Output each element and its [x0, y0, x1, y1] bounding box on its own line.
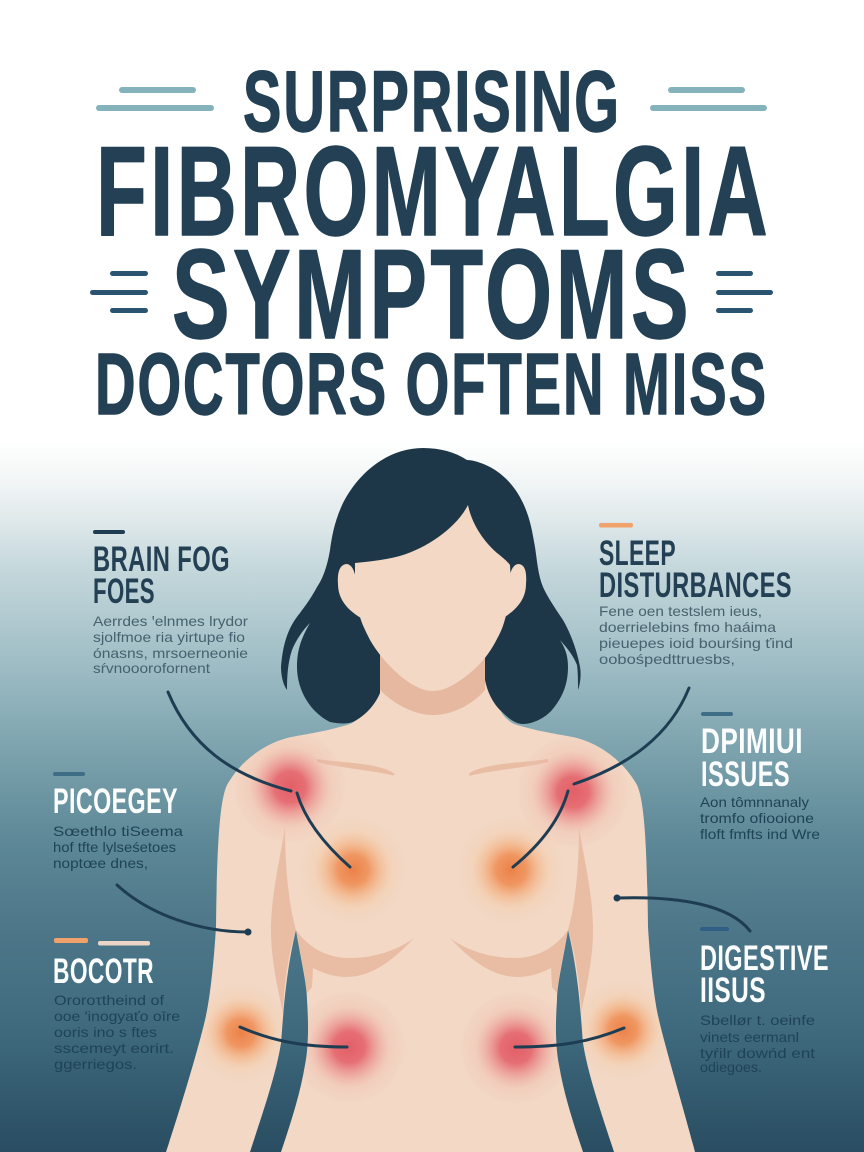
description: odiegoes.	[700, 1059, 762, 1075]
accent bar	[701, 712, 733, 716]
description: ooris ino s ftes	[54, 1024, 157, 1040]
description: ooe ʹinogyaťo oīre	[54, 1008, 180, 1024]
description	[599, 603, 793, 667]
heading: SLEEP	[599, 534, 676, 573]
panel: bocotr	[53, 938, 180, 1072]
hot spot: right chest	[469, 828, 553, 912]
description: sŕvnooorofornent	[93, 660, 210, 676]
description: pieuepes ioid bourśing ťind	[599, 635, 793, 651]
panel: sleep disturbances	[599, 523, 793, 667]
panel: digestive issues	[700, 927, 829, 1075]
figure: woman silhouette	[166, 448, 695, 1152]
title accent lines, lower	[90, 271, 773, 313]
connector: right elbow to abdomen	[515, 1028, 624, 1047]
connector dot: left arm	[244, 928, 252, 936]
connector: sleep to shoulder	[574, 688, 689, 784]
panel: brain fog foes	[93, 530, 248, 676]
hot spot: left chest	[311, 828, 395, 912]
description: Sbellør t. oeinfe	[700, 1012, 815, 1028]
heading second line: IISUS	[700, 971, 766, 1010]
description: floft fmfts ind Wre	[700, 826, 820, 842]
description	[700, 1012, 815, 1075]
heading: BOCOTR	[53, 952, 154, 991]
connector dot: right arm	[614, 894, 620, 902]
orange accent bar	[54, 938, 88, 943]
description	[93, 613, 248, 676]
heading: BRAIN FOG	[93, 540, 230, 579]
accent bar	[700, 927, 729, 931]
description: Sœethlo tiSeema	[53, 823, 183, 839]
description: Fene oen testslem ieus,	[599, 603, 762, 619]
neck shadow	[380, 655, 485, 715]
title accent lines, upper	[96, 87, 767, 111]
description	[54, 992, 180, 1072]
accent bar	[93, 530, 125, 534]
heading: DPIMIUI	[701, 722, 803, 761]
description: doerrielebins fmo haáima	[599, 619, 776, 635]
description: sjolfmoe ria yirtupe fio	[93, 629, 245, 645]
hot spot: right elbow	[581, 991, 664, 1068]
title line: surprising: SURPRISING	[243, 54, 621, 150]
heading second line: FOES	[93, 572, 155, 611]
connector: shoulder to left chest	[297, 793, 350, 867]
panel: dpimiui issues	[700, 712, 820, 842]
connector: brain fog to shoulder	[168, 692, 291, 791]
panel: picoegey	[53, 772, 183, 871]
connector: right arm to label	[617, 898, 750, 931]
beige accent bar	[98, 941, 150, 946]
description: noptœe dnes,	[53, 855, 148, 871]
description	[53, 823, 183, 871]
description: Aerrdes ꞌelnmes lrydor	[93, 613, 248, 629]
right ear	[503, 564, 526, 618]
heading second line: ISSUES	[701, 755, 790, 794]
title	[95, 54, 771, 433]
description: ónasns, mrsoerneonie	[93, 645, 248, 661]
heading: PICOEGEY	[53, 782, 178, 821]
hot spot: left elbow	[198, 994, 282, 1072]
description: oobośpedttruesbs,	[599, 651, 735, 667]
hair	[281, 448, 581, 724]
connector lines	[117, 688, 750, 1047]
torso and arms	[166, 660, 695, 1152]
accent bar	[53, 772, 85, 776]
hot spot: right shoulder	[528, 747, 618, 836]
description: tromfo ofiooione	[700, 810, 814, 826]
face	[355, 505, 511, 691]
body shading	[271, 759, 593, 1013]
description: vinets eermanl	[700, 1029, 799, 1045]
description: Ororoτtheind of	[54, 992, 164, 1008]
connector: shoulder to right chest	[513, 791, 568, 867]
description	[700, 794, 820, 842]
description: Aon tômnnanaly	[700, 794, 809, 810]
hot spot: left abdomen	[304, 1002, 394, 1092]
description: ggerriegos.	[54, 1056, 137, 1072]
connector: left label to arm	[117, 885, 248, 932]
description: tyŕilr dowńd ent	[700, 1045, 815, 1061]
description: hof tfte lylseśetoes	[53, 839, 176, 855]
description: sscemeyt eorirt.	[54, 1040, 174, 1056]
accent bar	[599, 523, 633, 528]
pain hot spots	[191, 731, 673, 1104]
hot spot: left shoulder	[245, 742, 334, 832]
connector: left elbow to abdomen	[240, 1027, 347, 1047]
left ear	[338, 564, 361, 618]
hot spot: right abdomen	[471, 1003, 561, 1092]
